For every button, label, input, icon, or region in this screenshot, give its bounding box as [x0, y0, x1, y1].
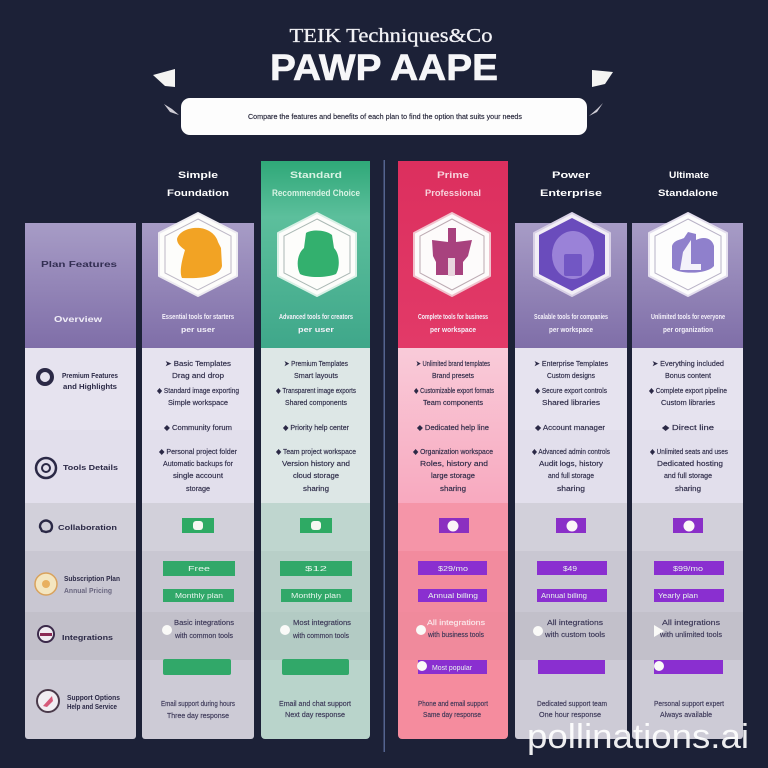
label: row 1: and Highlights: [63, 382, 117, 391]
footer note: [654, 699, 725, 719]
badge bar: Monthly plan: [175, 593, 223, 600]
plan summary: [279, 312, 353, 334]
label: row 1: Premium Features: [62, 371, 118, 380]
feature list: Smart layouts: [294, 371, 338, 380]
feature list: Team components: [423, 398, 483, 407]
badge bar: [537, 589, 607, 602]
action bar: [163, 659, 231, 675]
feature list: [413, 359, 494, 493]
icon: hexagon pink: [414, 213, 490, 296]
feature list: Simple workspace: [168, 398, 228, 407]
footer note: [537, 699, 607, 719]
bullet and note: with custom tools: [544, 630, 605, 639]
feature list: [276, 359, 356, 493]
icon: row 3: [40, 521, 52, 532]
label: plan features: Plan Features: [41, 260, 118, 269]
column heading: [272, 170, 360, 198]
feature list: ➤ Basic Templates: [165, 359, 231, 368]
plan summary: per workspace: [549, 325, 593, 334]
plan summary: per workspace: [430, 325, 476, 334]
badge bar: [163, 561, 235, 576]
bullet and note: with common tools: [174, 631, 233, 640]
plan summary: [162, 312, 234, 334]
bullet and note: All integrations: [427, 618, 485, 627]
center divider: [384, 160, 385, 752]
feature list: Shared libraries: [542, 398, 600, 407]
column heading: [167, 170, 229, 198]
footer note: [161, 699, 235, 720]
action bar: [538, 660, 605, 674]
chip: [673, 518, 703, 533]
title block: [270, 25, 498, 88]
column heading: Power: [552, 170, 591, 180]
badge bar: [654, 589, 724, 602]
watermark: pollinations.ai: [527, 718, 749, 756]
icon: row 2: [36, 458, 56, 478]
feature list: sharing: [440, 484, 466, 493]
tagline pill: [181, 98, 587, 135]
plan summary: Essential tools for starters: [162, 312, 234, 321]
badge bar: [280, 561, 352, 576]
feature list: ◆ Secure export controls: [535, 386, 607, 395]
icon: row 4: [35, 573, 57, 595]
plan summary: Scalable tools for companies: [534, 312, 608, 321]
feature list: Drag and drop: [172, 371, 224, 380]
badge bar: [418, 561, 487, 575]
footer note: [418, 699, 489, 719]
chip: [182, 518, 214, 533]
feature list: Automatic backups for: [163, 459, 233, 468]
label: overview: Overview: [54, 315, 103, 324]
footer note: Phone and email support: [418, 699, 489, 708]
icon: hexagon purple: [534, 213, 610, 296]
bullet and note: All integrations: [547, 618, 603, 627]
chip: [300, 518, 332, 533]
feature list: sharing: [303, 484, 329, 493]
feature list: single account: [173, 471, 224, 480]
icon: row 5: [38, 626, 54, 642]
label: row 5: Integrations: [62, 633, 113, 642]
feature list: [157, 359, 239, 493]
plan summary: [534, 312, 608, 334]
panel: row labels: [25, 223, 136, 739]
column heading: Standalone: [658, 188, 718, 198]
feature list: ➤ Premium Templates: [284, 359, 348, 368]
feature list: [649, 359, 728, 493]
feature list: Shared components: [285, 398, 347, 407]
label: row 6: [67, 693, 120, 711]
feature list: and full storage: [664, 471, 712, 480]
label: row 4: Annual Pricing: [64, 586, 112, 595]
column heading: Professional: [425, 188, 481, 198]
bullet and note: [280, 618, 351, 640]
plan summary: Complete tools for business: [418, 312, 488, 321]
feature list: storage: [186, 484, 210, 493]
bullet and note: with unlimited tools: [659, 630, 722, 639]
feature list: ◆ Priority help center: [283, 423, 349, 432]
bullet and note: [533, 618, 605, 639]
footer note: Next day response: [285, 710, 345, 719]
main title: PAWP AAPE: [270, 47, 498, 88]
badge bar: $12: [305, 566, 327, 573]
badge bar: Annual billing: [428, 593, 478, 600]
feature list: Brand presets: [432, 371, 474, 380]
icon: row 6: [37, 690, 59, 712]
column heading: Enterprise: [540, 188, 602, 198]
label: row 4: Subscription Plan: [64, 574, 120, 583]
column heading: Simple: [178, 170, 218, 180]
feature list: ◆ Personal project folder: [159, 447, 237, 456]
plan summary: per user: [298, 325, 334, 334]
footer note: Always available: [660, 710, 712, 719]
footer note: Email support during hours: [161, 699, 235, 708]
feature list: Custom libraries: [661, 398, 715, 407]
badge bar: [163, 589, 234, 602]
icon: row 1: [36, 368, 54, 386]
feature list: ◆ Unlimited seats and uses: [650, 447, 728, 456]
column heading: [540, 170, 602, 198]
plan summary: Unlimited tools for everyone: [651, 312, 725, 321]
icon: hexagon orange: [159, 213, 237, 296]
panel: column 1: [142, 170, 254, 739]
footer note: One hour response: [539, 710, 601, 719]
icon: right swoosh: [589, 103, 603, 116]
feature list: ◆ Team project workspace: [276, 447, 356, 456]
feature list: Dedicated hosting: [657, 459, 723, 468]
feature list: ◆ Dedicated help line: [417, 423, 489, 432]
label: row 3: Collaboration: [58, 523, 117, 532]
column heading: Foundation: [167, 188, 229, 198]
badge bar: [418, 589, 487, 602]
label: row 1: [62, 371, 118, 391]
bullet and note: [654, 618, 722, 639]
bullet and note: All integrations: [662, 618, 720, 627]
feature list: sharing: [675, 484, 701, 493]
label: row 2: Tools Details: [63, 463, 118, 472]
badge bar: $99/mo: [673, 566, 703, 573]
bullet and note: Most integrations: [293, 618, 351, 627]
feature list: Bonus content: [665, 371, 712, 380]
column heading: [658, 170, 718, 198]
action bar with bullet: [654, 660, 723, 674]
badge bar: $49: [563, 566, 577, 573]
feature list: cloud storage: [293, 471, 339, 480]
bullet and note: [162, 618, 234, 640]
badge bar: [537, 561, 607, 575]
feature list: ◆ Advanced admin controls: [532, 447, 610, 456]
feature list: ➤ Unlimited brand templates: [416, 359, 490, 368]
feature list: Version history and: [282, 459, 350, 468]
action bar with bullet: [417, 660, 487, 674]
icon: hexagon lilac: [649, 213, 727, 296]
icon: right ornament: [592, 70, 613, 87]
feature list: ◆ Account manager: [535, 423, 606, 432]
footer note: Same day response: [423, 710, 481, 719]
column heading: Standard: [290, 170, 342, 180]
bullet and note: with common tools: [292, 631, 349, 640]
plan summary: Advanced tools for creators: [279, 312, 353, 321]
plan summary: per user: [181, 325, 215, 334]
badge bar: Yearly plan: [658, 593, 698, 600]
panel: column 2 (green): [261, 161, 370, 739]
column heading: Recommended Choice: [272, 188, 360, 198]
plan summary: [651, 312, 725, 334]
icon: left ornament: [153, 69, 175, 87]
bullet and note: Basic integrations: [174, 618, 234, 627]
icon: left swoosh: [164, 104, 179, 115]
label: row 4: [64, 574, 120, 595]
bullet and note: with business tools: [427, 630, 484, 639]
feature list: ◆ Direct line: [662, 423, 714, 432]
feature list: ◆ Complete export pipeline: [649, 386, 727, 395]
feature list: ◆ Standard image exporting: [157, 386, 239, 395]
feature list: ◆ Customizable export formats: [414, 386, 494, 395]
feature list: Audit logs, history: [539, 459, 603, 468]
panel: column 3 (pink): [398, 161, 508, 739]
badge bar: [654, 561, 724, 575]
feature list: and full storage: [548, 471, 594, 480]
footer note: Personal support expert: [654, 699, 725, 708]
plan summary: per organization: [663, 325, 713, 334]
icon: hexagon green: [278, 213, 356, 296]
action bar: [282, 659, 349, 675]
feature list: [532, 359, 610, 493]
plan summary: [418, 312, 488, 334]
badge bar: [281, 589, 352, 602]
action bar with bullet: Most popular: [432, 665, 473, 672]
feature list: ◆ Community forum: [164, 423, 232, 432]
column heading: Ultimate: [669, 170, 709, 180]
feature list: ➤ Everything included: [652, 359, 724, 368]
badge bar: Monthly plan: [291, 593, 341, 600]
tagline text: Compare the features and benefits of each plan to find the option that suits your needs: [248, 112, 522, 121]
eyebrow title: TEIK Techniques&Co: [290, 25, 492, 47]
footer note: Email and chat support: [279, 699, 352, 708]
badge bar: Annual billing: [541, 593, 587, 600]
chip: [556, 518, 586, 533]
label: row 6: Support Options: [67, 693, 120, 702]
panel: column 5: [632, 170, 743, 739]
feature list: ◆ Transparent image exports: [276, 386, 356, 395]
column heading: [425, 170, 481, 198]
feature list: ➤ Enterprise Templates: [534, 359, 608, 368]
feature list: Custom designs: [547, 371, 595, 380]
panel: column 4: [515, 170, 627, 739]
footer note: [279, 699, 352, 719]
footer note: Three day response: [167, 711, 229, 720]
badge bar: $29/mo: [438, 566, 468, 573]
chip: [439, 518, 469, 533]
label: row 6: Help and Service: [67, 702, 117, 711]
feature list: ◆ Organization workspace: [413, 447, 493, 456]
feature list: Roles, history and: [420, 459, 488, 468]
bullet and note: [416, 618, 485, 639]
footer note: Dedicated support team: [537, 699, 607, 708]
feature list: sharing: [557, 484, 585, 493]
column heading: Prime: [437, 170, 469, 180]
feature list: large storage: [431, 471, 475, 480]
badge bar: Free: [188, 566, 210, 573]
